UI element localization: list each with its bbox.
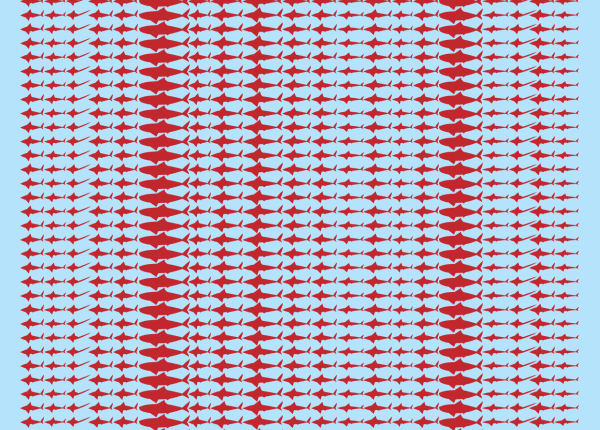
column 5: sharks	[110, 0, 142, 430]
column 20: slender sharks	[551, 0, 582, 430]
column 3: long-tailed sharks	[62, 0, 94, 430]
column 11: sharks	[308, 0, 340, 430]
column 12: slender sharks	[334, 0, 367, 430]
column 1: sharks	[15, 0, 50, 430]
column 2: sharks	[40, 0, 70, 430]
column 18: long-tailed sharks	[506, 0, 540, 430]
column 8: medium sharks	[206, 0, 246, 430]
column 14: slender sharks	[389, 0, 416, 430]
column 13: sharks	[360, 0, 395, 430]
column 7: sharks	[185, 0, 215, 430]
column 9: large sharks	[238, 0, 286, 430]
column 15: sharks	[410, 0, 442, 430]
column 4: sharks	[85, 0, 117, 430]
column 19: sharks	[526, 0, 558, 430]
column 17: slender sharks	[479, 0, 512, 430]
column 6: large sharks	[135, 0, 193, 430]
column 10: sharks	[278, 0, 314, 430]
column 16: large sharks	[436, 0, 486, 430]
